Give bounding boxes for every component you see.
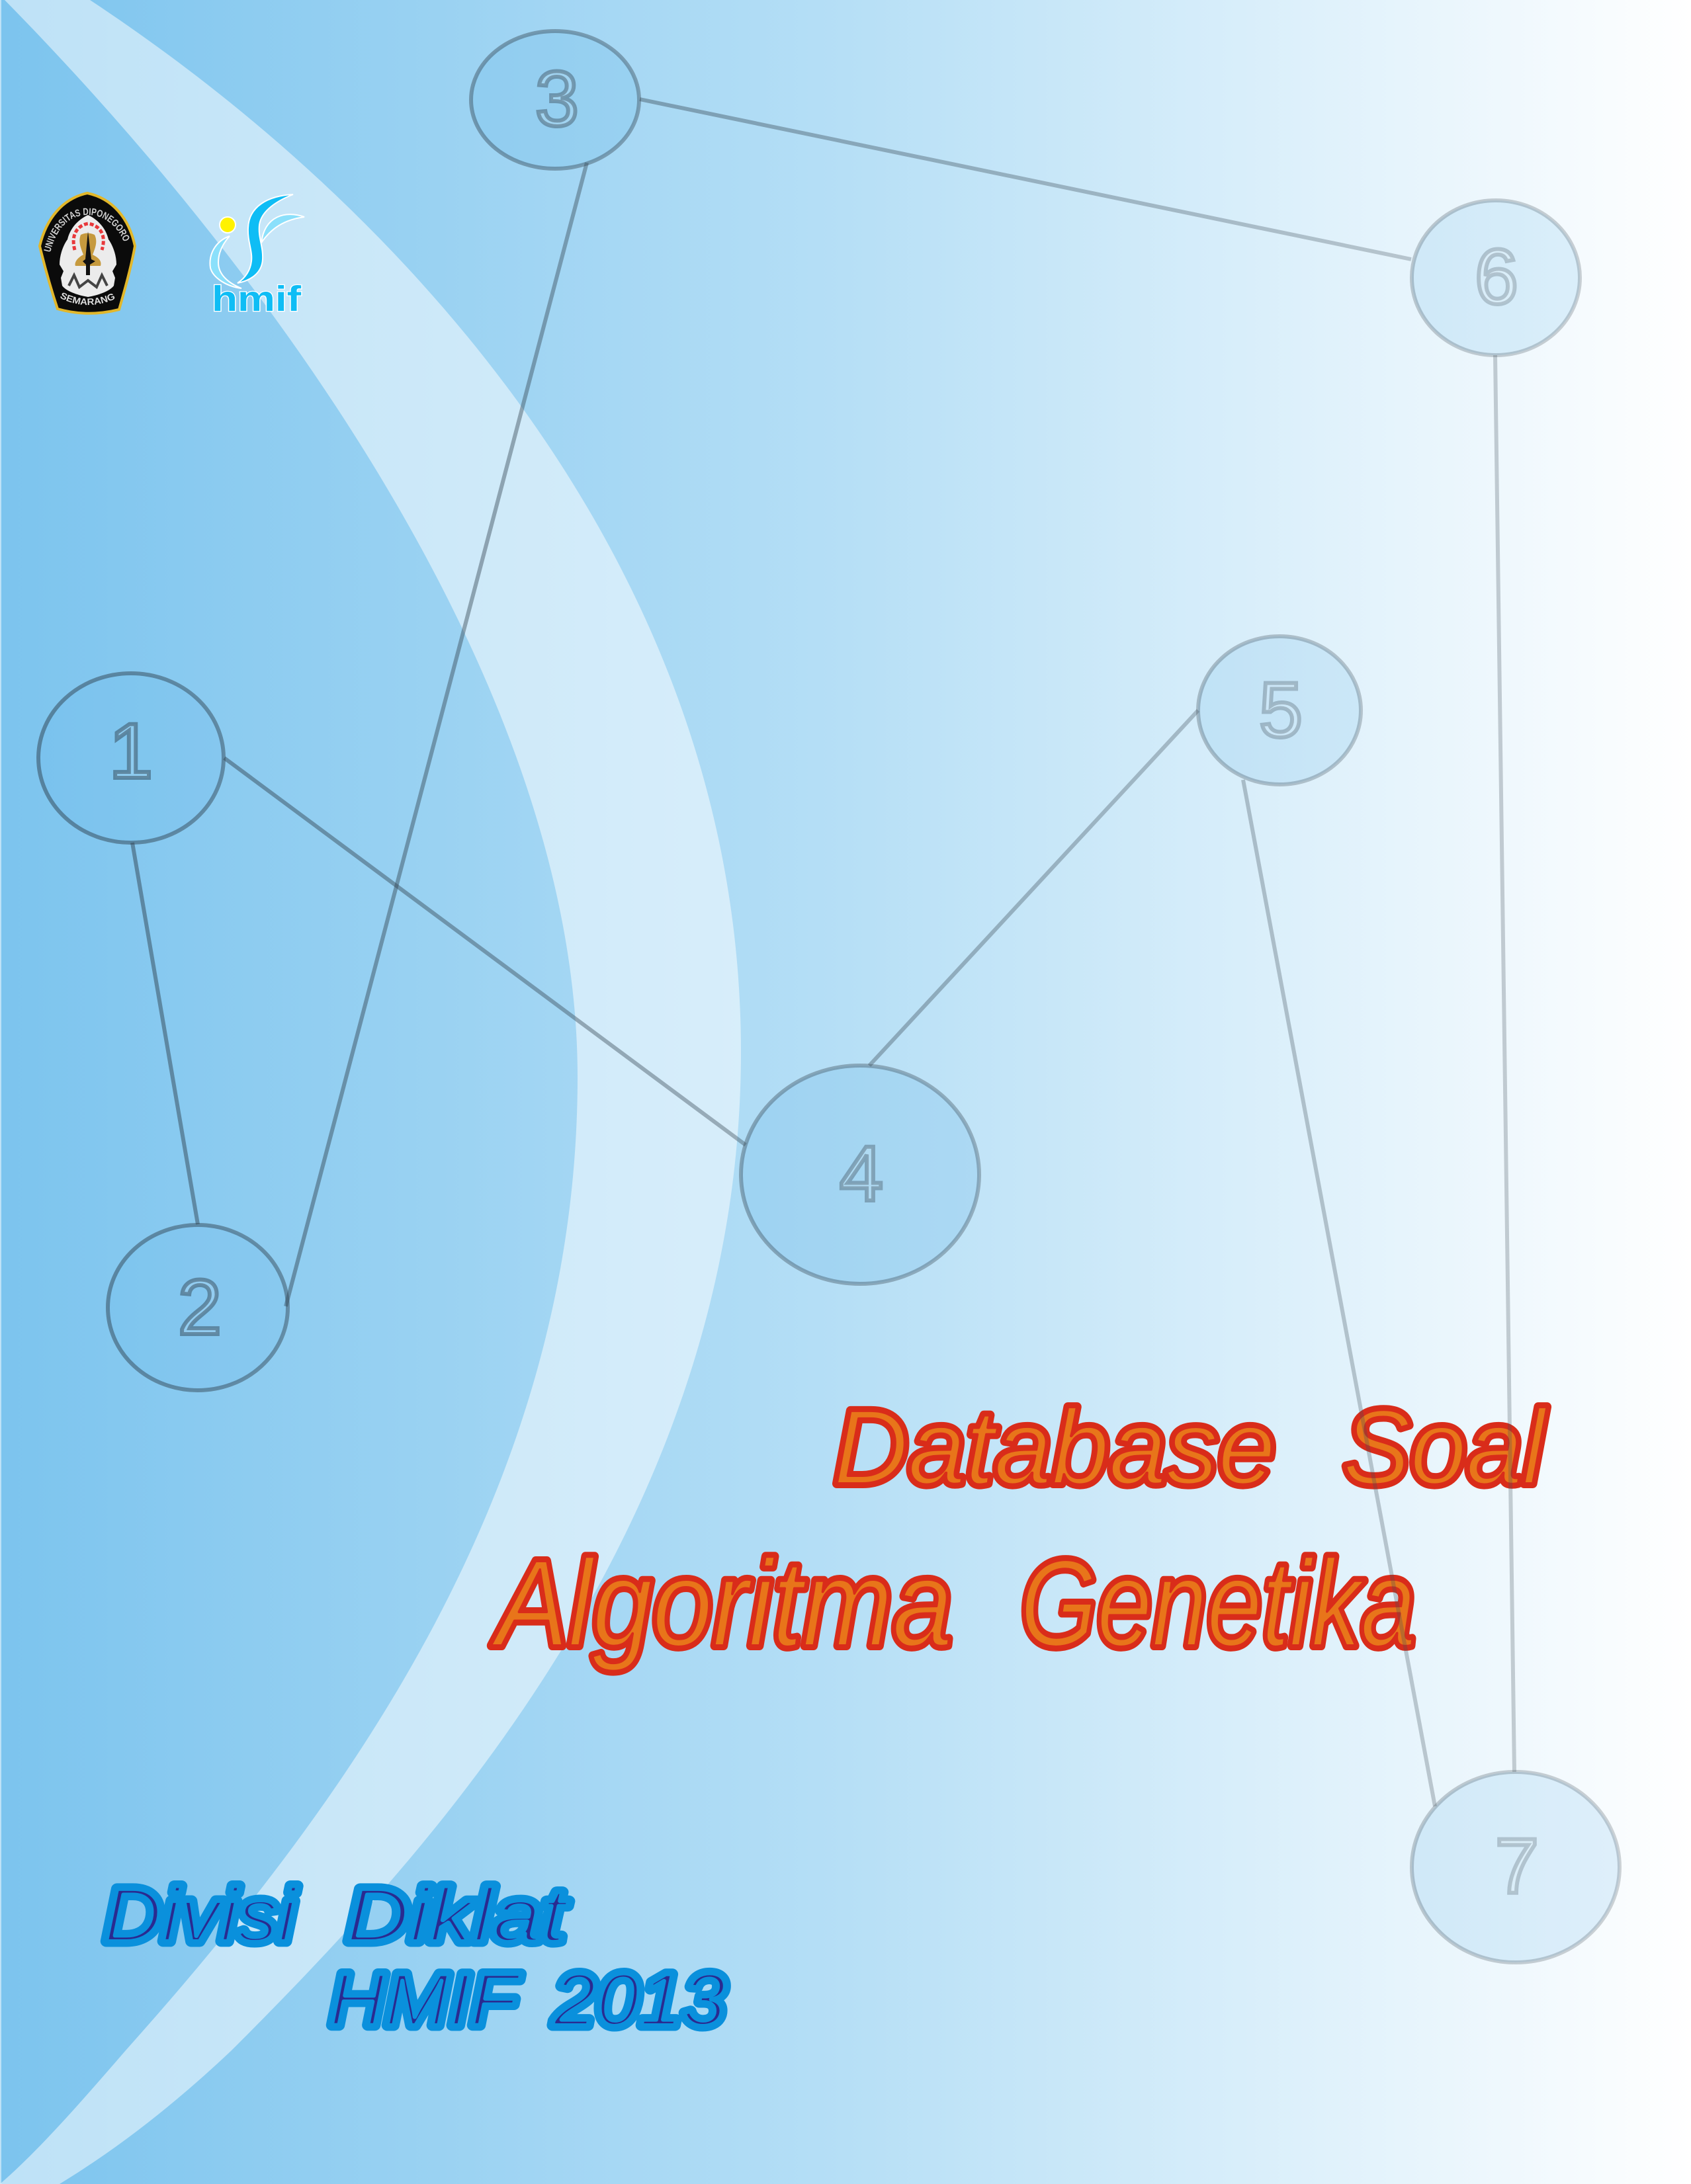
node 4: 4 — [840, 1130, 883, 1218]
node 3 — [471, 31, 639, 169]
node 7 — [1412, 1772, 1620, 1962]
credit: Divisi Diklat — [104, 1873, 569, 1958]
title: Database Soal — [834, 1388, 1547, 1506]
title: Database Soal: Database — [834, 1388, 1276, 1506]
curved light band — [0, 0, 741, 2184]
node 5 — [1198, 636, 1361, 784]
logo: Universitas Diponegoro shield — [38, 192, 136, 315]
node 4 — [741, 1066, 979, 1284]
credit: Divisi Diklat: Diklat — [346, 1873, 569, 1958]
node 3: 3 — [535, 56, 579, 143]
graph edges — [132, 99, 1514, 1806]
logo: hmif — [210, 194, 304, 319]
credit: Divisi Diklat: Divisi — [104, 1873, 298, 1958]
node 6: 6 — [1475, 233, 1518, 321]
credit: Divisi Diklat: Diklat — [346, 1873, 569, 1958]
credit: Divisi Diklat: Divisi — [104, 1873, 298, 1958]
node 2 — [108, 1225, 288, 1390]
logo: Universitas Diponegoro shield: UNIVERSITAS DIPONEGORO — [44, 208, 130, 251]
credit: HMIF 2013 — [329, 1958, 726, 2041]
title: Database Soal: Soal — [1343, 1388, 1547, 1506]
node 7: 7 — [1495, 1823, 1539, 1910]
node 5: 5 — [1259, 667, 1303, 754]
title: Algoritma Genetika: Algoritma — [490, 1535, 953, 1672]
credit: HMIF 2013: HMIF — [329, 1958, 521, 2041]
logo: Universitas Diponegoro shield: SEMARANG — [60, 292, 115, 306]
node 2: 2 — [178, 1264, 222, 1351]
credit: HMIF 2013: 2013 — [552, 1958, 726, 2041]
logo: hmif: hmif — [212, 279, 302, 319]
credit: HMIF 2013: HMIF — [329, 1958, 521, 2041]
node 6 — [1412, 200, 1580, 355]
node 1 — [38, 673, 224, 843]
title: Algoritma Genetika: Algoritma — [490, 1535, 953, 1672]
node 1: 1 — [109, 708, 153, 795]
title: Algoritma Genetika — [490, 1535, 1416, 1672]
title: Database Soal: Soal — [1343, 1388, 1547, 1506]
title: Database Soal: Database — [834, 1388, 1276, 1506]
title: Algoritma Genetika: Genetika — [1020, 1535, 1416, 1672]
left edge highlight — [0, 0, 1, 2184]
title: Algoritma Genetika: Genetika — [1020, 1535, 1416, 1672]
credit: HMIF 2013: 2013 — [552, 1958, 726, 2041]
